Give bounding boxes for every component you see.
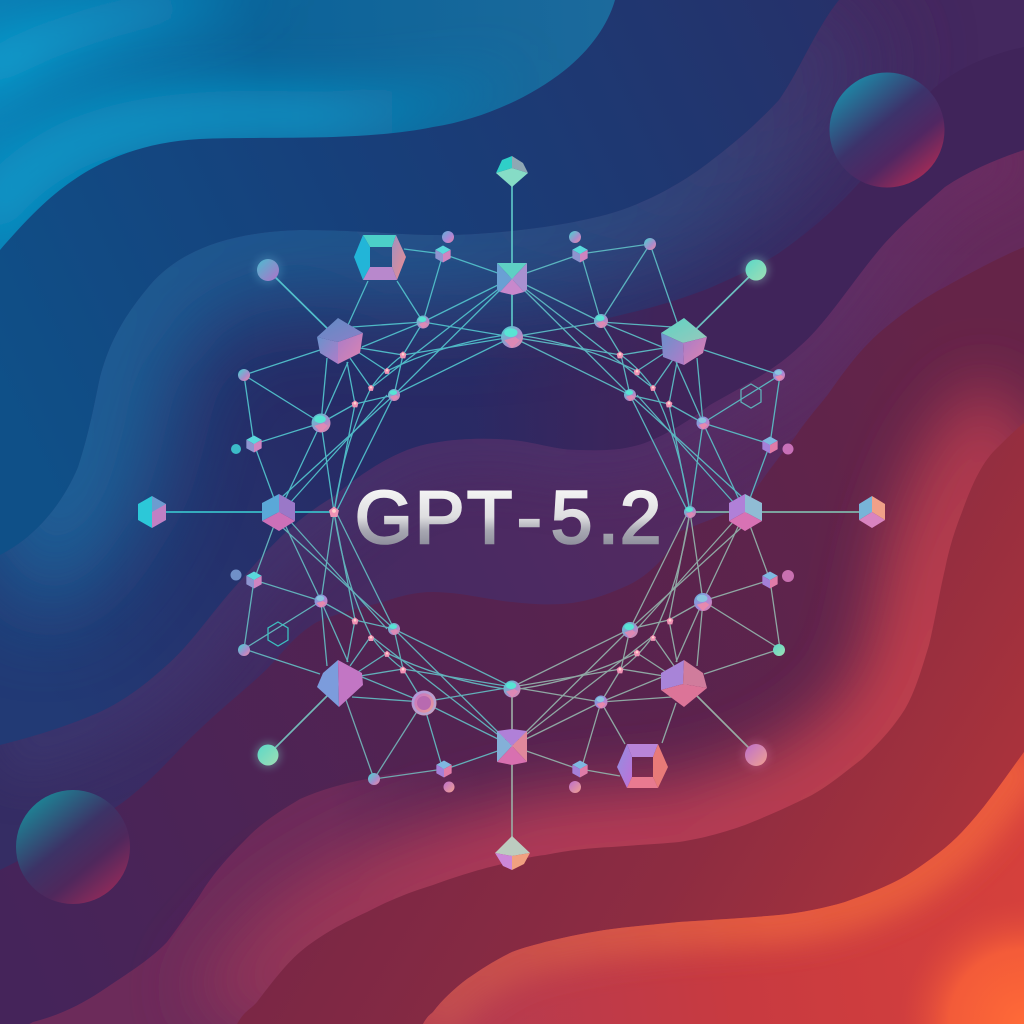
outline hexagon: upper right — [741, 384, 761, 408]
outer sphere: top left — [254, 256, 282, 284]
gem: right hexagon — [859, 496, 885, 528]
decorative sphere: bottom left — [16, 790, 130, 904]
gem: top cube — [497, 263, 527, 295]
decorative sphere: top right — [830, 72, 944, 188]
small nodes: top left quadrant — [231, 231, 523, 517]
outer sphere: bottom right — [742, 741, 770, 769]
outer sphere: bottom left — [255, 742, 281, 768]
frame gem: top left — [354, 235, 406, 280]
gem: large top right — [661, 318, 707, 365]
gem: right inner node — [729, 494, 762, 531]
gem: large bottom left — [317, 660, 363, 707]
gem: bottom cube — [497, 729, 527, 765]
gem: left hexagon — [138, 496, 166, 528]
gem: top diamond — [496, 156, 528, 187]
outer sphere: top right — [743, 257, 769, 283]
gem: large top left — [317, 318, 363, 364]
ring node — [412, 690, 436, 716]
small nodes: bottom left quadrant — [230, 570, 520, 792]
network: connection lines — [152, 170, 872, 853]
frame gem: bottom right — [617, 744, 668, 788]
title: GPT-5.2 — [355, 476, 661, 559]
small nodes: bottom right quadrant — [569, 570, 794, 793]
gem: large bottom right — [661, 660, 707, 707]
small nodes: top right quadrant — [569, 231, 794, 518]
outline hexagon: lower left — [268, 622, 288, 646]
gem: left inner node — [262, 494, 295, 531]
gem: bottom diamond — [495, 836, 530, 870]
